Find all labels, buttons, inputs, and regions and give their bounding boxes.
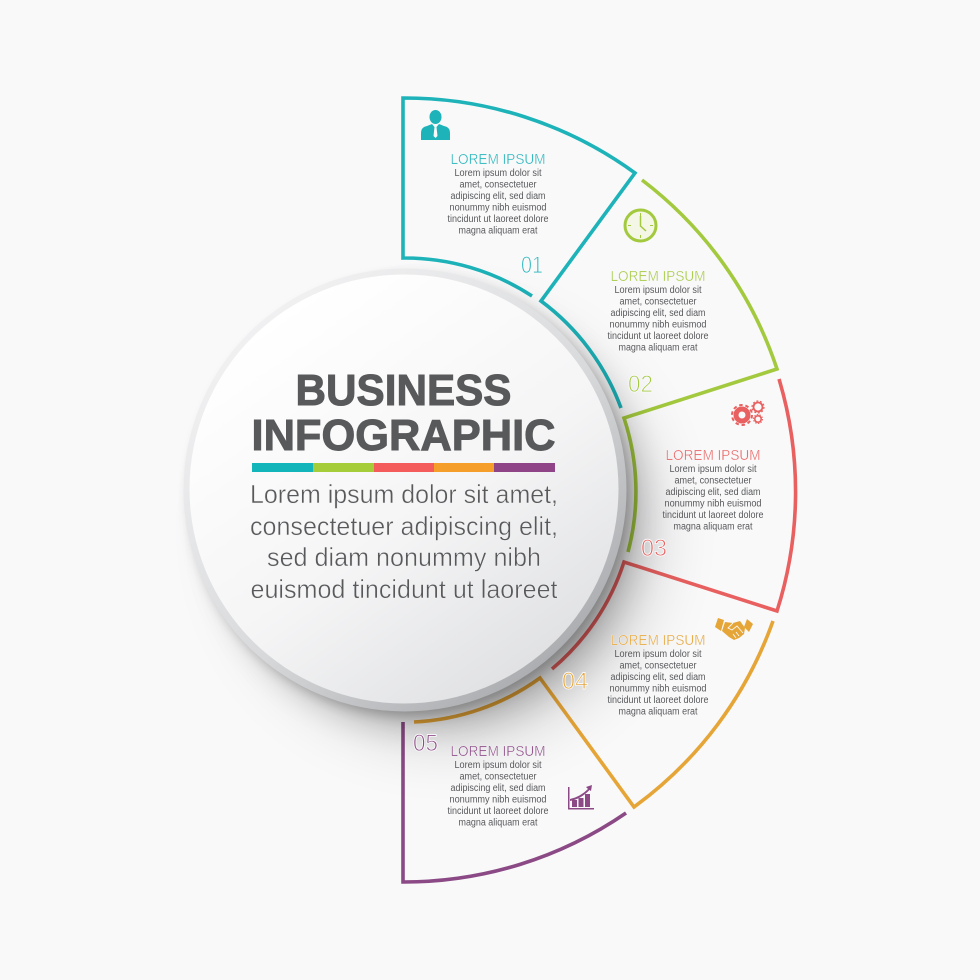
body 03: nonummy nibh euismod	[664, 498, 762, 509]
body 03: tincidunt ut laoreet dolore	[662, 510, 764, 521]
body 04: Lorem ipsum dolor sit	[614, 649, 702, 660]
number 01: 01	[521, 252, 543, 279]
segment outline 04	[414, 621, 773, 807]
body 03: adipiscing elit, sed diam	[666, 487, 760, 498]
intro paragraph: Lorem ipsum dolor sit amet,	[250, 479, 558, 509]
body 01: adipiscing elit, sed diam	[450, 191, 546, 202]
icon: growth chart	[568, 785, 594, 810]
panel 01 text	[448, 151, 549, 236]
disc contact shadow	[190, 276, 630, 716]
body 05: adipiscing elit, sed diam	[450, 783, 546, 794]
body 02: tincidunt ut laoreet dolore	[608, 331, 709, 342]
heading 04: LOREM IPSUM	[610, 632, 706, 649]
body 02: adipiscing elit, sed diam	[610, 308, 706, 319]
segment outline 05	[403, 722, 626, 882]
body 04: adipiscing elit, sed diam	[610, 672, 706, 683]
body 04: magna aliquam erat	[618, 706, 698, 717]
number 02: 02	[628, 371, 653, 398]
body 02: nonummy nibh euismod	[610, 319, 706, 330]
body 01: tincidunt ut laoreet dolore	[448, 214, 549, 225]
icon: businessman	[421, 110, 450, 140]
body 05: tincidunt ut laoreet dolore	[448, 806, 549, 817]
body 03: magna aliquam erat	[674, 521, 753, 532]
body 03	[662, 464, 764, 532]
colour bar	[252, 463, 555, 472]
intro paragraph: sed diam nonummy nibh	[267, 542, 541, 572]
body 01	[448, 168, 549, 236]
body 04: tincidunt ut laoreet dolore	[608, 695, 709, 706]
panel 02 text	[608, 268, 709, 353]
segment outline 03	[552, 379, 796, 669]
heading 03: LOREM IPSUM	[666, 447, 760, 464]
body 02: Lorem ipsum dolor sit	[614, 285, 702, 296]
central disc	[184, 268, 626, 712]
body 01: magna aliquam erat	[458, 225, 538, 236]
body 04: amet, consectetuer	[620, 660, 697, 672]
panel 04 text	[608, 632, 709, 717]
panel 03 text	[662, 447, 764, 532]
heading 02: LOREM IPSUM	[610, 268, 706, 285]
heading 01: LOREM IPSUM	[450, 151, 546, 168]
body 05: Lorem ipsum dolor sit	[454, 760, 542, 771]
body 02	[608, 285, 709, 353]
icon: handshake	[715, 618, 753, 640]
body 03: amet, consectetuer	[674, 476, 752, 486]
body 02: magna aliquam erat	[618, 342, 698, 353]
panel 05 text	[448, 743, 549, 828]
icon: clock	[625, 210, 656, 241]
heading 05: LOREM IPSUM	[450, 743, 546, 760]
intro paragraph: euismod tincidunt ut laoreet	[250, 574, 558, 604]
disc face	[190, 274, 618, 704]
body 01: amet, consectetuer	[460, 180, 537, 190]
main title: BUSINESS	[296, 366, 512, 415]
body 04	[608, 649, 709, 717]
body 04: nonummy nibh euismod	[610, 683, 706, 694]
icon: gears	[732, 401, 764, 425]
number 05: 05	[413, 730, 438, 757]
body 05	[448, 760, 549, 828]
body 01: nonummy nibh euismod	[450, 202, 546, 213]
number 04: 04	[562, 668, 588, 695]
segment outline 02	[624, 180, 777, 552]
intro paragraph: consectetuer adipiscing elit,	[250, 511, 558, 541]
number 03: 03	[641, 535, 667, 562]
disc rim	[184, 268, 626, 712]
body 05: magna aliquam erat	[458, 817, 538, 828]
disc wide shadow	[240, 325, 650, 735]
body 02: amet, consectetuer	[620, 296, 697, 308]
main title: INFOGRAPHIC	[252, 411, 556, 460]
body 01: Lorem ipsum dolor sit	[454, 168, 542, 179]
body 03: Lorem ipsum dolor sit	[670, 464, 757, 475]
body 05: nonummy nibh euismod	[450, 794, 546, 805]
intro paragraph	[250, 479, 558, 604]
body 05: amet, consectetuer	[460, 772, 537, 782]
disc soft shadow	[213, 298, 637, 722]
segment outline 01	[403, 98, 635, 408]
main title	[252, 366, 556, 460]
